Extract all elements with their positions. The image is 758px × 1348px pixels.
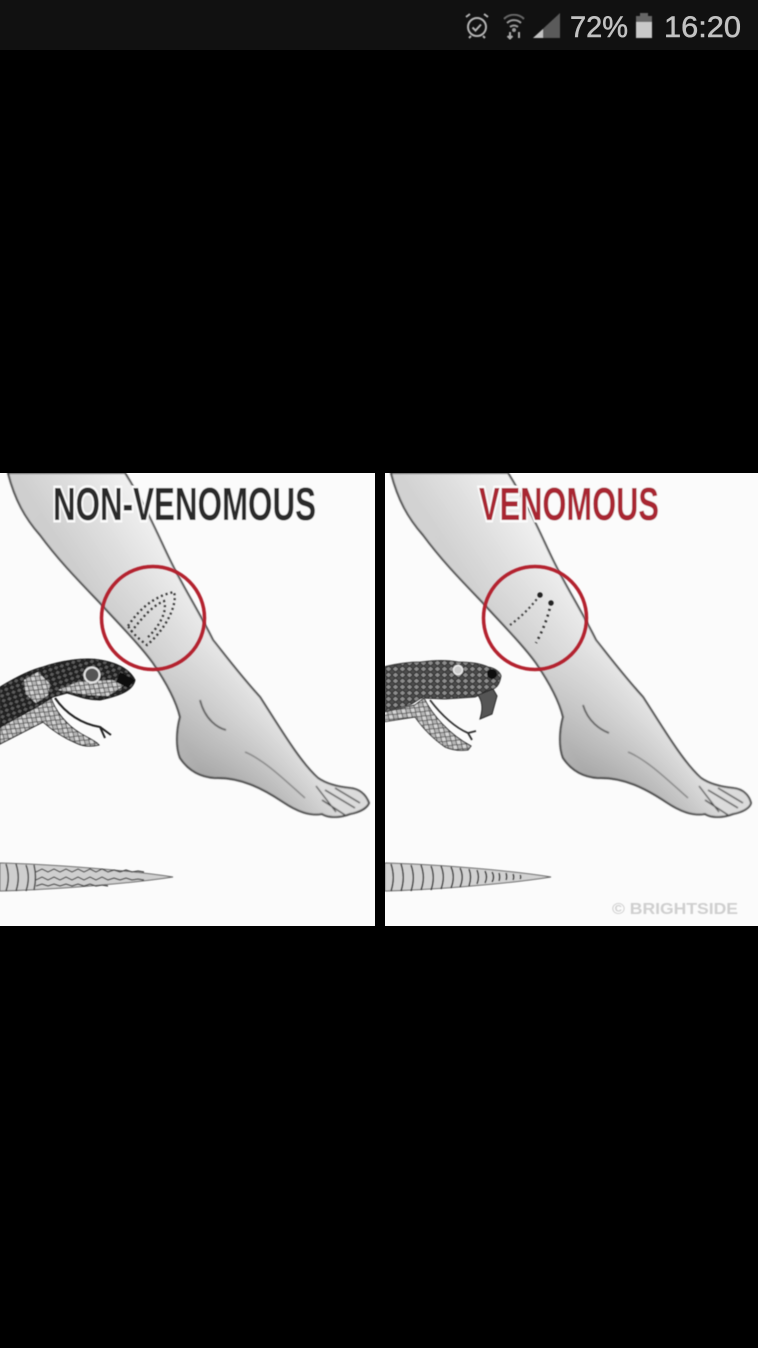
snake tongue bbox=[55, 698, 111, 738]
icon: alarm clock bbox=[466, 14, 488, 38]
snake lower jaw bbox=[383, 698, 471, 750]
heading: venomous: VENOMOUS bbox=[479, 478, 659, 530]
panel: venomous bbox=[383, 473, 758, 926]
snake head with fang bbox=[383, 660, 501, 719]
snake head, harmless type bbox=[0, 659, 135, 727]
icon: signal strength bbox=[533, 13, 560, 38]
snake lower jaw bbox=[0, 695, 99, 746]
infographic canvas bbox=[0, 0, 758, 926]
icon: wifi bbox=[504, 15, 524, 39]
divider between panels bbox=[375, 473, 385, 926]
red highlight circle bbox=[102, 566, 204, 670]
red highlight circle bbox=[484, 566, 586, 670]
leg and foot bbox=[391, 473, 751, 817]
clock: 16:20 bbox=[664, 11, 741, 44]
icon: battery bbox=[636, 13, 652, 38]
snake tail with single-row scales bbox=[385, 863, 551, 891]
watermark: © BRIGHTSIDE bbox=[612, 901, 738, 918]
snake tail with zigzag scales bbox=[0, 863, 173, 891]
leg and foot bbox=[8, 473, 369, 817]
bite marks: two rows of small dots on each side bbox=[128, 592, 175, 645]
snake tongue bbox=[430, 700, 476, 740]
status bar bbox=[0, 0, 758, 50]
heading: non-venomous: NON-VENOMOUS bbox=[53, 478, 316, 530]
battery percentage: 72% bbox=[570, 11, 628, 44]
panel: non-venomous bbox=[0, 473, 375, 926]
bite marks: two rows ending in fang punctures bbox=[510, 592, 554, 643]
